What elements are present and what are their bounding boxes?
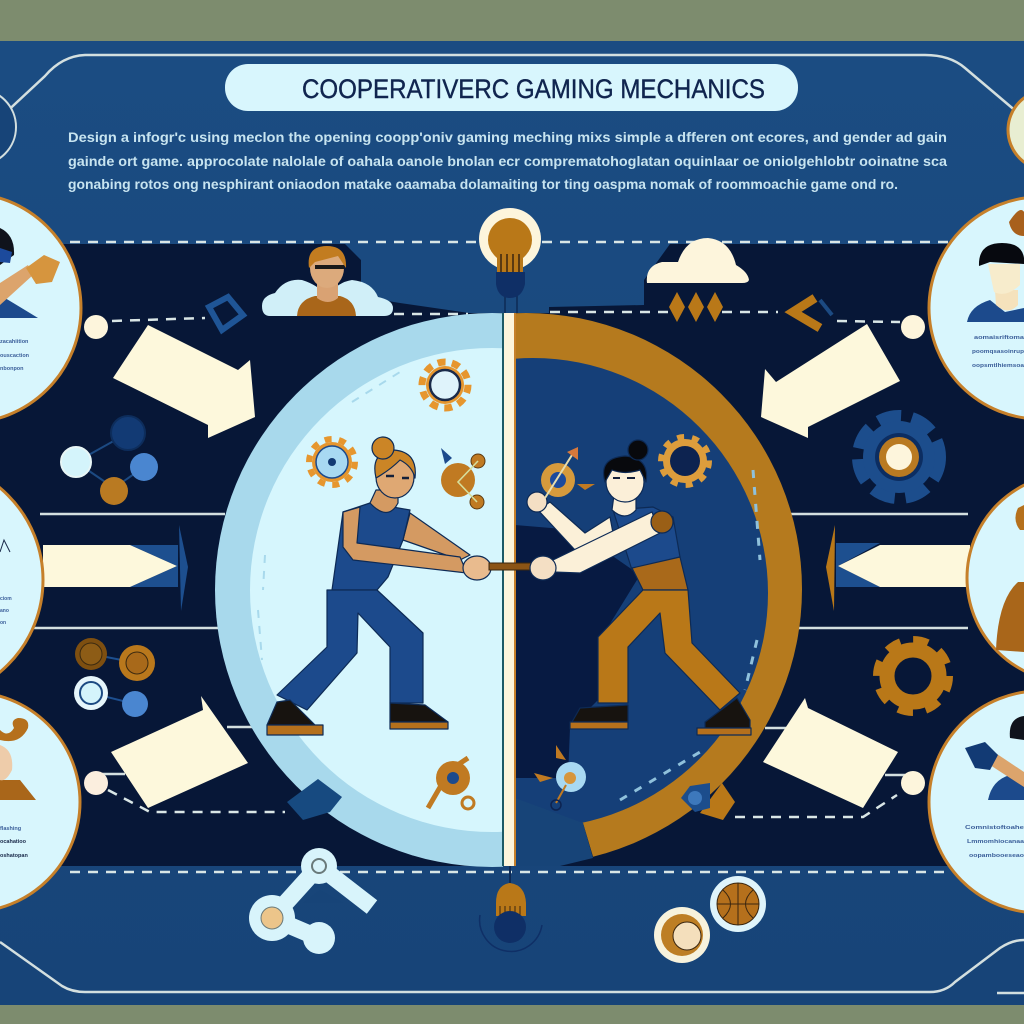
right cloud	[647, 238, 749, 283]
left cloud with person	[262, 246, 393, 316]
bottom left dot	[84, 771, 108, 795]
icon: top light bulb	[479, 208, 541, 313]
left player hands	[463, 556, 491, 580]
icon: diamonds	[669, 292, 723, 322]
icon: brown bracket	[793, 298, 832, 328]
right player hair	[604, 456, 647, 482]
portrait: top left circle	[0, 193, 81, 423]
intro paragraph: gonabing rotos ong nesphirant oniaodon matake oaamaba dolamaiting tor ting oaspma nomak of roommoachie game ond ro.	[68, 177, 898, 192]
left player bun	[372, 437, 394, 459]
right half: navy with brown ring	[516, 313, 802, 866]
left player eyes	[386, 476, 409, 478]
icon: gear dark right	[661, 437, 709, 485]
icon: hub bottom left	[428, 758, 474, 809]
portrait: top right circle: poomqsasoinrup	[972, 349, 1024, 355]
portrait: bottom left circle: oshatopan	[0, 853, 28, 859]
arrow: top right	[761, 324, 900, 438]
portrait: top left circle: zacahiition	[0, 339, 29, 345]
top left corner medallion	[0, 89, 16, 165]
icon: hub left	[441, 448, 485, 509]
left player head	[376, 456, 414, 498]
portrait: bottom left circle: flashing	[0, 826, 21, 832]
arrow: middle left	[43, 525, 188, 611]
right player front arm	[553, 512, 660, 573]
dark central band	[0, 244, 1024, 866]
icon: gear top centre	[422, 362, 468, 408]
icon: blue pentagon outline	[209, 297, 243, 330]
left half: light	[215, 313, 503, 867]
intro paragraph: Design a infogr'c using meclon the opening coopp'oniv gaming meching mixs simple a dfferen ont ecores, and gender ad gain	[68, 130, 947, 145]
icon: share network bottom	[249, 848, 372, 954]
portrait: top left circle: nbonpon	[0, 366, 24, 372]
portrait: middle left circle: on	[0, 620, 6, 626]
center divider	[502, 313, 516, 866]
dashed rules	[70, 242, 950, 872]
icon: bottom light bulb	[480, 866, 542, 951]
right player back arm	[538, 502, 613, 550]
portrait: bottom left circle: ocahatioo	[0, 839, 27, 845]
bottom right dot	[901, 771, 925, 795]
portrait: bottom left circle	[0, 692, 80, 912]
portrait: top right circle	[929, 197, 1024, 419]
icon: hexagon badge right	[681, 783, 735, 820]
arrow: bottom right	[763, 698, 898, 808]
portrait: middle left circle	[0, 460, 43, 700]
figure: right player	[527, 440, 751, 735]
portrait: middle left circle: ano	[0, 608, 9, 614]
intro paragraph	[68, 130, 948, 192]
icon: brown gear	[880, 643, 946, 709]
icon: gear eye left	[309, 439, 355, 485]
left player far arm	[403, 513, 470, 560]
arrow: top left	[113, 325, 255, 438]
left player torso	[332, 503, 410, 590]
right player head	[606, 462, 644, 502]
portrait: middle right circle	[967, 474, 1024, 682]
right player eyes	[613, 477, 635, 479]
left player trousers	[277, 590, 423, 710]
icon: network lower left	[74, 638, 155, 717]
right player hands	[530, 556, 556, 580]
left player right shoe	[390, 703, 448, 729]
title pill: COOPERATIVERC GAMING MECHANICS	[302, 74, 765, 104]
portrait: bottom right circle: oopambooeseao	[969, 853, 1024, 859]
portrait: top right circle: aomaisriftoma	[974, 335, 1024, 341]
portrait: bottom right circle	[929, 691, 1024, 913]
icon: hub bottom right	[534, 745, 586, 810]
right player neck	[612, 495, 636, 516]
arrow: middle right	[826, 525, 970, 611]
arrow: bottom left	[111, 696, 248, 808]
right player trousers	[598, 590, 740, 710]
icon: hexagon badge left	[287, 779, 342, 820]
solid connector lines	[32, 514, 968, 775]
intro paragraph: gainde ort game. approcolate nalolale of oahala oanole bnolan ecr comprematohoglatan oquinlaar oe oniolgehlobtr ooinatne sca	[68, 154, 948, 169]
right player left shoe	[570, 705, 628, 729]
central split circle	[215, 313, 802, 867]
left player near arm	[343, 507, 467, 573]
top left dot	[84, 315, 108, 339]
portrait: middle left circle: ciom	[0, 596, 12, 602]
portrait: top right circle: oopsmtlhiemsoa	[972, 363, 1024, 369]
icon: hub right	[541, 447, 595, 498]
top right dot	[901, 315, 925, 339]
portrait: bottom right circle: Lmmomhiocanaa	[967, 839, 1024, 845]
left player neck	[370, 490, 398, 512]
rope between players	[489, 563, 531, 570]
icon: navy gear	[863, 421, 935, 493]
title pill	[225, 64, 798, 111]
portrait: top left circle: ouscaction	[0, 353, 30, 359]
icon: basketball	[710, 876, 766, 932]
right player shoulder	[651, 511, 673, 533]
left player left shoe	[267, 700, 323, 735]
right player waist	[632, 557, 688, 590]
icon: network top left	[61, 416, 158, 505]
right player torso	[613, 507, 680, 570]
figure: left player	[267, 437, 491, 735]
right player right shoe	[697, 698, 751, 735]
left player hair	[375, 450, 415, 478]
right player bun	[628, 440, 648, 460]
top right corner medallion	[1008, 90, 1024, 170]
icon: orange token	[654, 907, 710, 963]
portrait: bottom right circle: Comnistoftoahe	[965, 825, 1024, 831]
